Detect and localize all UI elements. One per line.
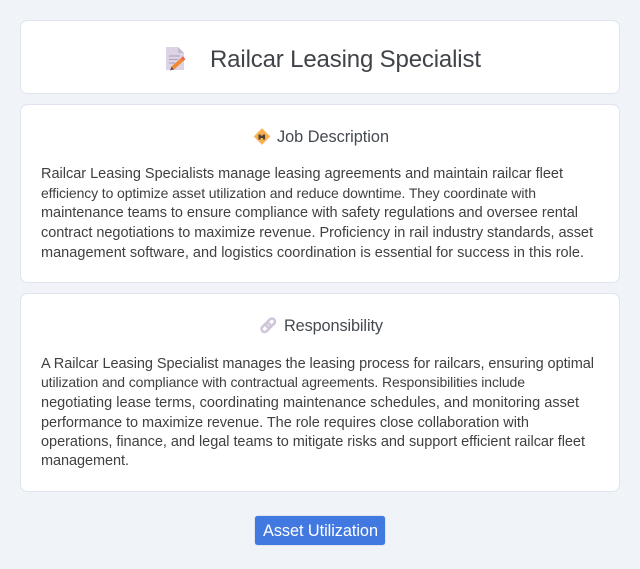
- title: Railcar Leasing Specialist: [210, 46, 481, 73]
- panel: title header: [20, 20, 620, 94]
- text block: responsibility: [41, 356, 594, 469]
- text block: job description: maintenance teams to ensure compliance with safety regulations and oversee rental: [41, 205, 578, 221]
- heading: job description: Job Description: [277, 128, 389, 146]
- text block: responsibility: A Railcar Leasing Specialist manages the leasing process for railcars, ensuring optimal: [41, 356, 594, 372]
- button: asset utilization: Asset Utilization: [263, 522, 378, 540]
- text block: responsibility: utilization and compliance with contractual agreements. Responsibilities include: [41, 374, 525, 390]
- text block: responsibility: operations, finance, and legal teams to mitigate risks and support efficient railcar fleet: [41, 434, 585, 450]
- text block: job description: contract negotiations to maximize revenue. Proficiency in rail industry standards, asset: [41, 225, 593, 241]
- text block: job description: [41, 166, 593, 261]
- text block: job description: Railcar Leasing Specialists manage leasing agreements and maintain railcar fleet: [41, 166, 563, 182]
- text block: responsibility: negotiating lease terms, coordinating maintenance schedules, and monitoring asset: [41, 395, 579, 411]
- panel: responsibility: [20, 294, 620, 492]
- text block: job description: management software, and logistics coordination is essential for success in this role.: [41, 245, 584, 261]
- text block: responsibility: management.: [41, 453, 129, 469]
- text block: job description: efficiency to optimize asset utilization and reduce downtime. They coordinate with: [41, 185, 536, 201]
- icon: chain link: [260, 317, 276, 333]
- icon: document with pencil: [166, 47, 186, 70]
- heading: responsibility: Responsibility: [284, 317, 384, 335]
- icon: railway diamond sign: [254, 128, 270, 144]
- text block: responsibility: performance to maximize revenue. The role requires close collaboration with: [41, 415, 529, 431]
- panel: job description: [20, 104, 620, 282]
- button: asset utilization: [254, 516, 386, 546]
